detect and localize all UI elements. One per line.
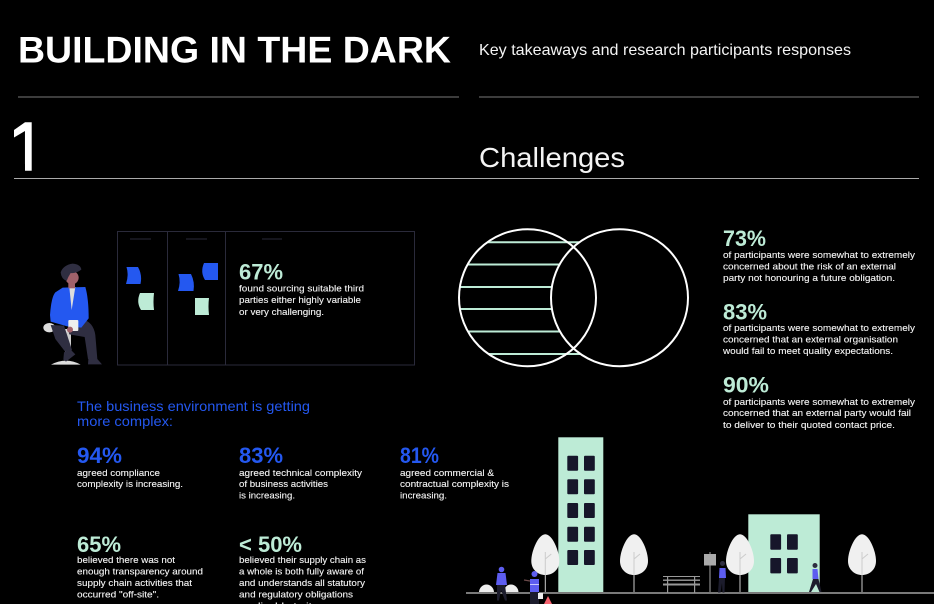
illustration: seated person bbox=[43, 264, 102, 365]
stat: 83% technical: is increasing. bbox=[239, 490, 295, 502]
stat: 94%: complexity is increasing. bbox=[77, 479, 183, 490]
stat: 90%: to deliver to their quoted contact price. bbox=[723, 420, 895, 431]
stat: 73%: 73% bbox=[723, 226, 766, 251]
stat: 73%: party not honouring a future obligation. bbox=[723, 273, 895, 284]
heading: business environment: more complex: bbox=[77, 413, 173, 429]
section number: 1 bbox=[7, 108, 46, 186]
stat: 83% quality: of participants were somewhat to extremely bbox=[723, 323, 915, 334]
worker with tablet bbox=[496, 567, 507, 600]
illustration: street scene bbox=[466, 437, 934, 604]
section number bbox=[14, 122, 32, 171]
heading: business environment bbox=[77, 398, 310, 429]
stat: 65%: occurred "off-site". bbox=[77, 590, 159, 600]
tree bbox=[726, 534, 754, 592]
stat: 81%: agreed commercial & bbox=[400, 468, 495, 479]
walking person bbox=[809, 563, 822, 592]
stat: 67%: found sourcing suitable third bbox=[239, 284, 364, 294]
stat: 94%: 94% bbox=[77, 443, 122, 468]
tall building bbox=[558, 437, 603, 593]
stat: 73%: of participants were somewhat to extremely bbox=[723, 250, 915, 261]
board frame bbox=[118, 232, 414, 365]
stat: 73% bbox=[723, 226, 915, 284]
stat: under 50%: and understands all statutory bbox=[239, 578, 365, 589]
person with phone bbox=[718, 561, 726, 592]
stat: 94% bbox=[77, 443, 183, 490]
stat: 65%: enough transparency around bbox=[77, 566, 203, 578]
short building bbox=[748, 514, 820, 593]
stat: under 50%: < 50% bbox=[239, 532, 302, 557]
heading: business environment: The business environment is getting bbox=[77, 398, 310, 414]
stat: under 50%: a whole is both fully aware of bbox=[239, 566, 364, 578]
venn diagram bbox=[459, 229, 688, 366]
stat: 81%: contractual complexity is bbox=[400, 479, 509, 490]
stat: under 50% bbox=[239, 532, 366, 604]
sticky notes bbox=[126, 263, 218, 315]
stat: 67%: parties either highly variable bbox=[239, 295, 361, 306]
tree bbox=[531, 534, 559, 592]
sign post bbox=[704, 552, 716, 593]
stat: 67%: or very challenging. bbox=[239, 307, 324, 318]
stat: 81% bbox=[400, 443, 509, 502]
stat: 65%: 65% bbox=[77, 532, 121, 557]
traffic cone bbox=[544, 596, 552, 604]
bushes bbox=[479, 584, 518, 592]
stat: 83% quality bbox=[722, 300, 915, 357]
tree bbox=[620, 534, 648, 592]
stat: 90%: concerned that an external party would fail bbox=[723, 408, 911, 419]
stat: 83% technical: agreed technical complexity bbox=[239, 468, 362, 479]
stat: 83% technical: of business activities bbox=[239, 479, 328, 490]
stat: 81%: increasing. bbox=[400, 490, 447, 502]
stat: 83% quality: would fail to meet quality expectations. bbox=[722, 346, 893, 357]
panel: kanban board with 67% stat bbox=[118, 232, 414, 365]
tree bbox=[848, 534, 876, 592]
stat: 65%: believed there was not bbox=[77, 555, 175, 566]
stat: 67% bbox=[239, 260, 364, 318]
stat: 90%: 90% bbox=[723, 372, 769, 398]
stat: 90% bbox=[723, 372, 915, 431]
worker with phone bbox=[524, 571, 543, 604]
bench bbox=[663, 576, 700, 593]
ground line bbox=[466, 592, 934, 594]
stat: 90%: of participants were somewhat to extremely bbox=[723, 397, 915, 408]
stat: 83% technical bbox=[239, 443, 362, 502]
stat: 73%: concerned about the risk of an external bbox=[723, 262, 896, 272]
title: BUILDING IN THE DARK bbox=[18, 30, 451, 71]
stat: 81%: 81% bbox=[400, 443, 439, 468]
stat: under 50%: believed their supply chain as bbox=[239, 555, 366, 566]
stat: 83% quality: concerned that an external organisation bbox=[723, 334, 898, 346]
stat: 67%: 67% bbox=[239, 260, 283, 284]
stat: 65%: supply chain activities that bbox=[77, 578, 192, 589]
subtitle: Key takeaways and research participants responses bbox=[479, 42, 851, 59]
stat: 83% quality: 83% bbox=[723, 300, 767, 324]
stat: 83% technical: 83% bbox=[239, 443, 283, 468]
stat: under 50%: and regulatory obligations bbox=[239, 590, 353, 600]
stat: 65% bbox=[77, 532, 203, 600]
stat: 94%: agreed compliance bbox=[77, 468, 160, 479]
section heading: Challenges bbox=[479, 142, 625, 173]
